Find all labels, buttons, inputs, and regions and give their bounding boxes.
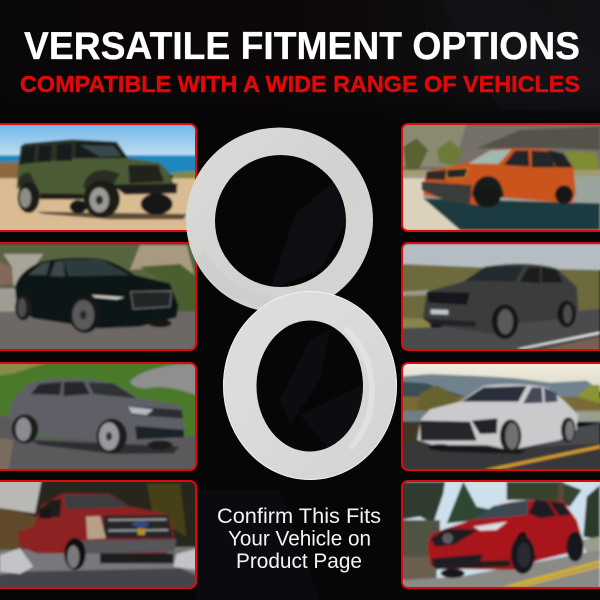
panel: dark grey SUV on road photo: [400, 243, 600, 353]
callout: confirm fitment: Confirm This Fits: [217, 505, 381, 528]
panel: silver sedan photo: [400, 362, 600, 471]
washer: bottom ring: [223, 291, 397, 480]
panel: red pickup truck photo: [0, 480, 203, 590]
callout: confirm fitment: Your Vehicle on: [228, 528, 371, 550]
subtitle: COMPATIBLE WITH A WIDE RANGE OF VEHICLES: [20, 71, 580, 97]
title: VERSATILE FITMENT OPTIONS: [24, 25, 580, 68]
panel: black sedan photo: [0, 243, 203, 353]
panel: red crossover photo: [400, 480, 600, 590]
panel: green jeep photo: [0, 123, 203, 232]
panel: grey SUV coupe photo: [0, 362, 203, 472]
callout: confirm fitment: Product Page: [236, 550, 362, 573]
panel: orange SUV in water photo: [400, 123, 600, 233]
callout: confirm fitment: [217, 505, 381, 573]
washer: top ring: [186, 127, 373, 313]
